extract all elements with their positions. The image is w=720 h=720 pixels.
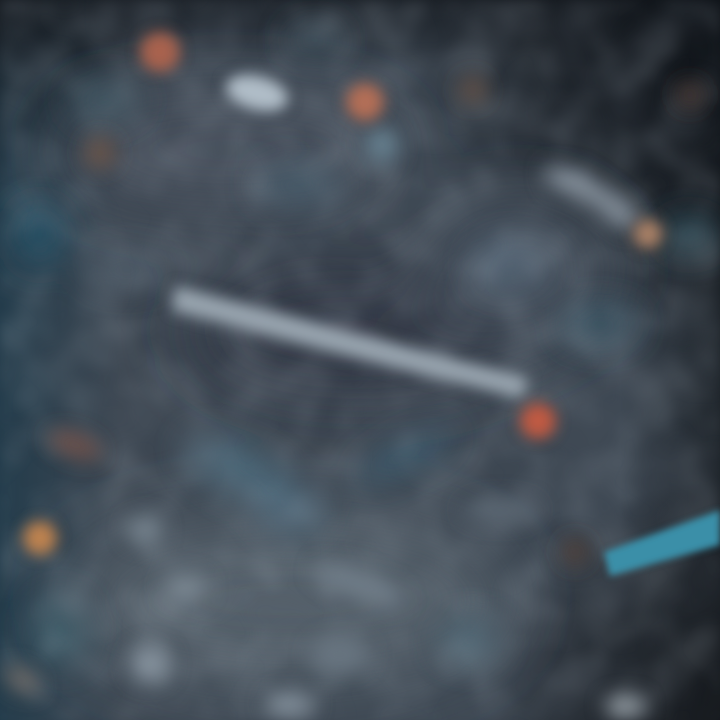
muted orange data points: [45, 76, 704, 566]
long pale streak: [172, 286, 528, 398]
pale oval marker: [222, 68, 292, 118]
upper right pale streak: [545, 166, 640, 232]
orange data points: [23, 32, 663, 555]
teal bar: [604, 510, 720, 576]
pale blurred data points: [0, 127, 645, 716]
